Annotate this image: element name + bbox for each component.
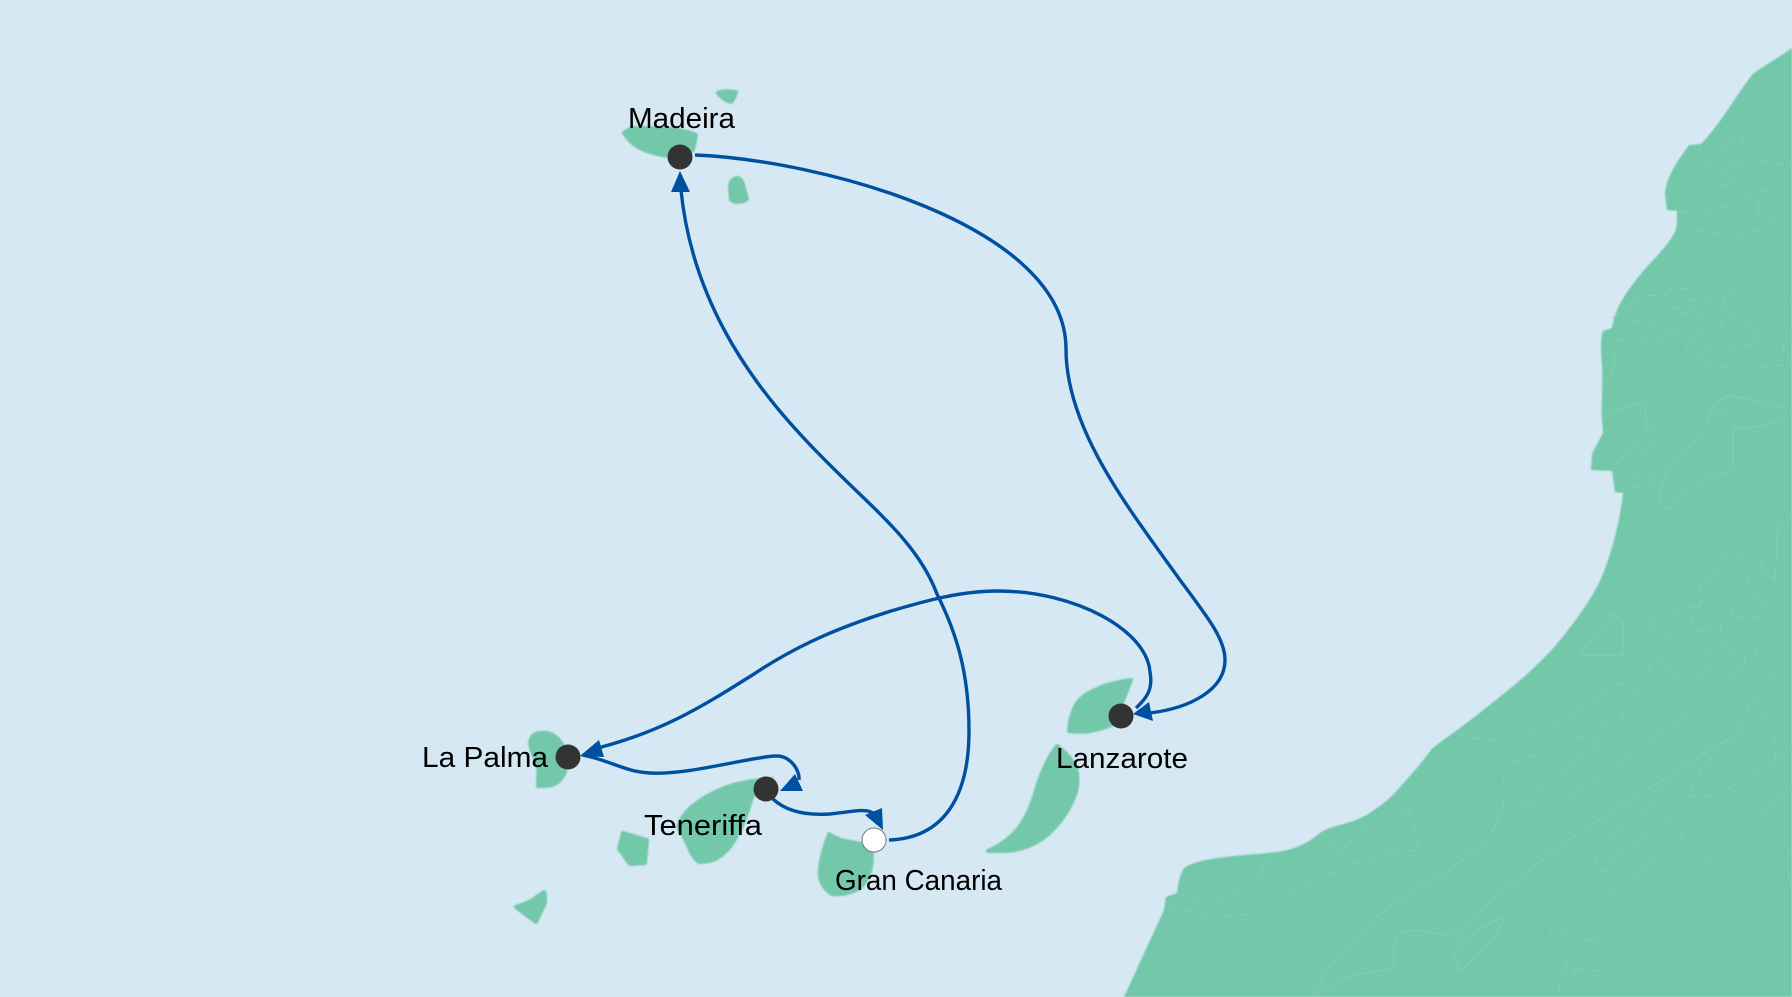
terrain contours	[1603, 135, 1792, 500]
port marker: Teneriffa	[754, 776, 778, 802]
port marker: Madeira	[668, 144, 692, 170]
island: La Gomera	[619, 833, 647, 864]
route: Gran Canaria to Madeira	[671, 171, 969, 840]
route: Teneriffa to Gran Canaria	[773, 799, 883, 830]
route: La Palma to Teneriffa	[582, 755, 803, 791]
island: Madeira	[624, 128, 696, 157]
label: Gran Canaria: Gran Canaria	[835, 865, 1003, 897]
label: Madeira: Madeira	[628, 103, 736, 135]
arrow head: Gran Canaria	[865, 808, 883, 830]
arrow head: Lanzarote	[1133, 702, 1153, 721]
arrow head: Teneriffa	[780, 774, 803, 791]
island: El Hierro	[516, 892, 545, 922]
port marker: Lanzarote	[1108, 704, 1134, 728]
island: Gran Canaria	[820, 834, 872, 894]
route: Madeira to Lanzarote	[695, 155, 1225, 721]
island: Porto Santo	[718, 91, 736, 102]
port marker: La Palma	[556, 744, 580, 770]
island: Fuerteventura	[988, 746, 1077, 851]
island: Desertas	[730, 178, 747, 202]
port marker: Gran Canaria start	[862, 828, 886, 852]
route: Lanzarote to La Palma	[580, 591, 1151, 757]
island: Lanzarote	[1069, 680, 1131, 732]
African mainland	[1124, 48, 1792, 997]
island: Teneriffa	[678, 779, 772, 862]
island: La Palma	[530, 733, 565, 786]
arrow head: Madeira	[671, 171, 690, 192]
label: Lanzarote: Lanzarote	[1056, 743, 1188, 775]
arrow head: La Palma	[580, 740, 604, 757]
label: La Palma: La Palma	[422, 742, 549, 774]
label: Teneriffa: Teneriffa	[644, 810, 763, 842]
